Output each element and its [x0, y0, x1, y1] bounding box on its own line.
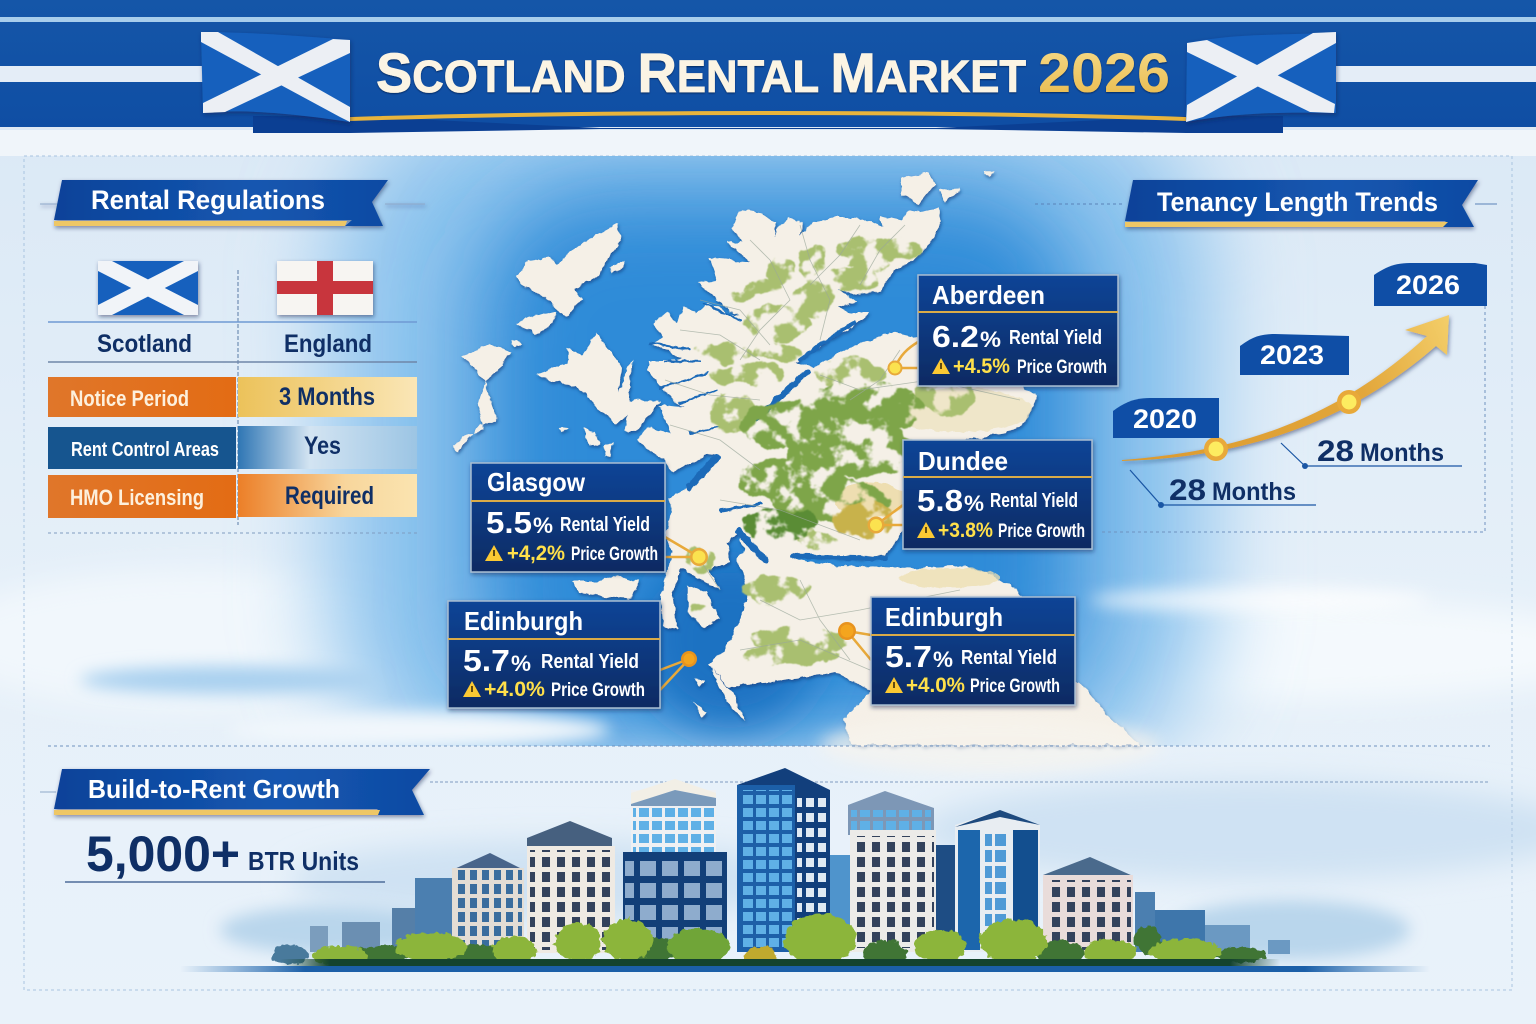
building 2 — [527, 821, 615, 953]
callout 28 months 2020: Months — [1212, 478, 1296, 506]
building 6 — [955, 810, 1040, 952]
trees — [272, 914, 1280, 966]
building 3 — [623, 779, 727, 952]
callout: Glasgow: Rental Yield — [560, 514, 650, 536]
flag: England — [277, 261, 373, 315]
heading ribbon: rental regulations: Rental Regulations — [91, 185, 325, 215]
map of Scotland — [453, 171, 1160, 773]
callout: Aberdeen: 6.2 — [932, 319, 979, 354]
building 7 — [1043, 857, 1133, 953]
callout 28 months 2020 — [1130, 470, 1316, 508]
row: notice period — [48, 377, 417, 417]
trend point 2020 — [1204, 437, 1228, 461]
callout: Edinburgh east: Rental Yield — [961, 647, 1057, 669]
southern fade — [820, 717, 1160, 773]
light green upland patches — [684, 238, 975, 665]
callout: Edinburgh east: +4.0% — [906, 674, 965, 697]
skyline — [180, 768, 1430, 972]
callout: Edinburgh west: 5.7 — [463, 643, 510, 678]
callout: Edinburgh east — [838, 597, 1075, 705]
callout: Glasgow: Price Growth — [571, 544, 658, 565]
label 2020 — [1113, 398, 1219, 438]
callout: Edinburgh west: % — [511, 651, 531, 676]
rivers and roads — [665, 225, 1020, 670]
label 2020: 2020 — [1133, 404, 1197, 434]
callout: Aberdeen: +4.5% — [953, 355, 1010, 378]
column: England: England — [284, 330, 372, 358]
callout: Dundee: % — [964, 491, 984, 516]
ground line — [180, 966, 1430, 972]
row: rent control areas: Rent Control Areas — [71, 439, 219, 461]
callout: Dundee: Rental Yield — [990, 490, 1078, 512]
callout: Edinburgh west: Rental Yield — [541, 651, 639, 673]
pale lowland washes — [834, 388, 1032, 588]
row: notice period: 3 Months — [279, 383, 375, 411]
row: rent control areas — [48, 426, 417, 469]
callout: Glasgow: % — [533, 513, 553, 538]
callout: Edinburgh west: +4.0% — [484, 678, 545, 701]
callout: Glasgow: +4,2% — [507, 542, 565, 565]
column: Scotland: Scotland — [97, 330, 192, 358]
callout: Glasgow — [471, 463, 708, 572]
callout: Dundee: Price Growth — [998, 521, 1085, 542]
callout: Edinburgh east: Price Growth — [970, 676, 1060, 697]
label 2026: 2026 — [1396, 270, 1460, 300]
callout: Aberdeen: Rental Yield — [1009, 327, 1102, 349]
heading ribbon: tenancy length trends: Tenancy Length Trends — [1157, 187, 1438, 217]
callout 28 months 2020: 28 — [1169, 474, 1206, 507]
callout: Edinburgh west: Price Growth — [551, 680, 645, 701]
callout: Dundee: 5.8 — [917, 483, 963, 518]
row: notice period: Notice Period — [70, 386, 189, 411]
trend arrow — [1122, 315, 1449, 461]
building 4 — [737, 768, 830, 952]
callout: Edinburgh west — [448, 601, 697, 708]
sea lochs — [650, 303, 886, 560]
callout: Dundee — [868, 440, 1092, 549]
header banner — [0, 0, 1536, 133]
frame dotted — [24, 156, 1512, 990]
callout: Aberdeen — [888, 275, 1118, 386]
trend point 2023 — [1337, 390, 1361, 414]
callout: Aberdeen: Aberdeen — [932, 280, 1045, 310]
callout: Edinburgh west: Edinburgh — [464, 606, 583, 636]
title year: 2026 — [1038, 41, 1170, 104]
background buildings — [310, 878, 1290, 954]
callout: Aberdeen: Price Growth — [1017, 357, 1107, 378]
label 2023 — [1240, 334, 1349, 375]
building 1 — [452, 853, 524, 953]
row: HMO licensing — [48, 474, 417, 518]
callout 28 months 2023 — [1281, 435, 1462, 469]
callout: Dundee: Dundee — [918, 446, 1008, 476]
dark green central highlands — [735, 382, 924, 541]
land masses — [453, 171, 1139, 745]
heading ribbon: tenancy length trends — [1125, 180, 1478, 227]
row: HMO licensing: HMO Licensing — [70, 485, 204, 510]
stat: 5,000+ BTR units: BTR Units — [248, 846, 359, 876]
row: HMO licensing: Required — [285, 482, 374, 510]
sea behind map — [80, 110, 1430, 770]
callout 28 months 2023: Months — [1360, 439, 1444, 467]
flag: Scotland right — [1186, 32, 1336, 122]
flag: Scotland small — [98, 261, 198, 315]
callout: Aberdeen: % — [980, 327, 1001, 352]
callout 28 months 2023: 28 — [1317, 435, 1354, 468]
panel: rental regulations — [40, 180, 425, 533]
building 5 — [830, 791, 955, 952]
heading ribbon: build-to-rent growth: Build-to-Rent Growth — [88, 774, 340, 804]
flag: Scotland left — [201, 32, 350, 122]
callout: Edinburgh east: % — [933, 647, 953, 672]
callout: Glasgow: Glasgow — [487, 467, 586, 497]
callout: Edinburgh east: Edinburgh — [885, 602, 1003, 632]
callout: Edinburgh east: 5.7 — [885, 639, 932, 674]
stat: 5,000+ BTR units — [65, 826, 385, 882]
heading ribbon: rental regulations — [40, 180, 425, 226]
stat: 5,000+ BTR units: 5,000+ — [86, 826, 240, 882]
callout: Glasgow: 5.5 — [486, 505, 532, 540]
label 2023: 2023 — [1260, 340, 1324, 370]
title: SCOTLAND RENTAL MARKET — [376, 41, 1026, 104]
heading ribbon: build-to-rent growth — [54, 769, 430, 815]
panel: tenancy length trends — [1035, 180, 1497, 532]
callout: Dundee: +3.8% — [938, 519, 993, 542]
row: rent control areas: Yes — [304, 432, 341, 460]
panel: build-to-rent growth — [40, 746, 1490, 882]
label 2026 — [1374, 263, 1487, 306]
